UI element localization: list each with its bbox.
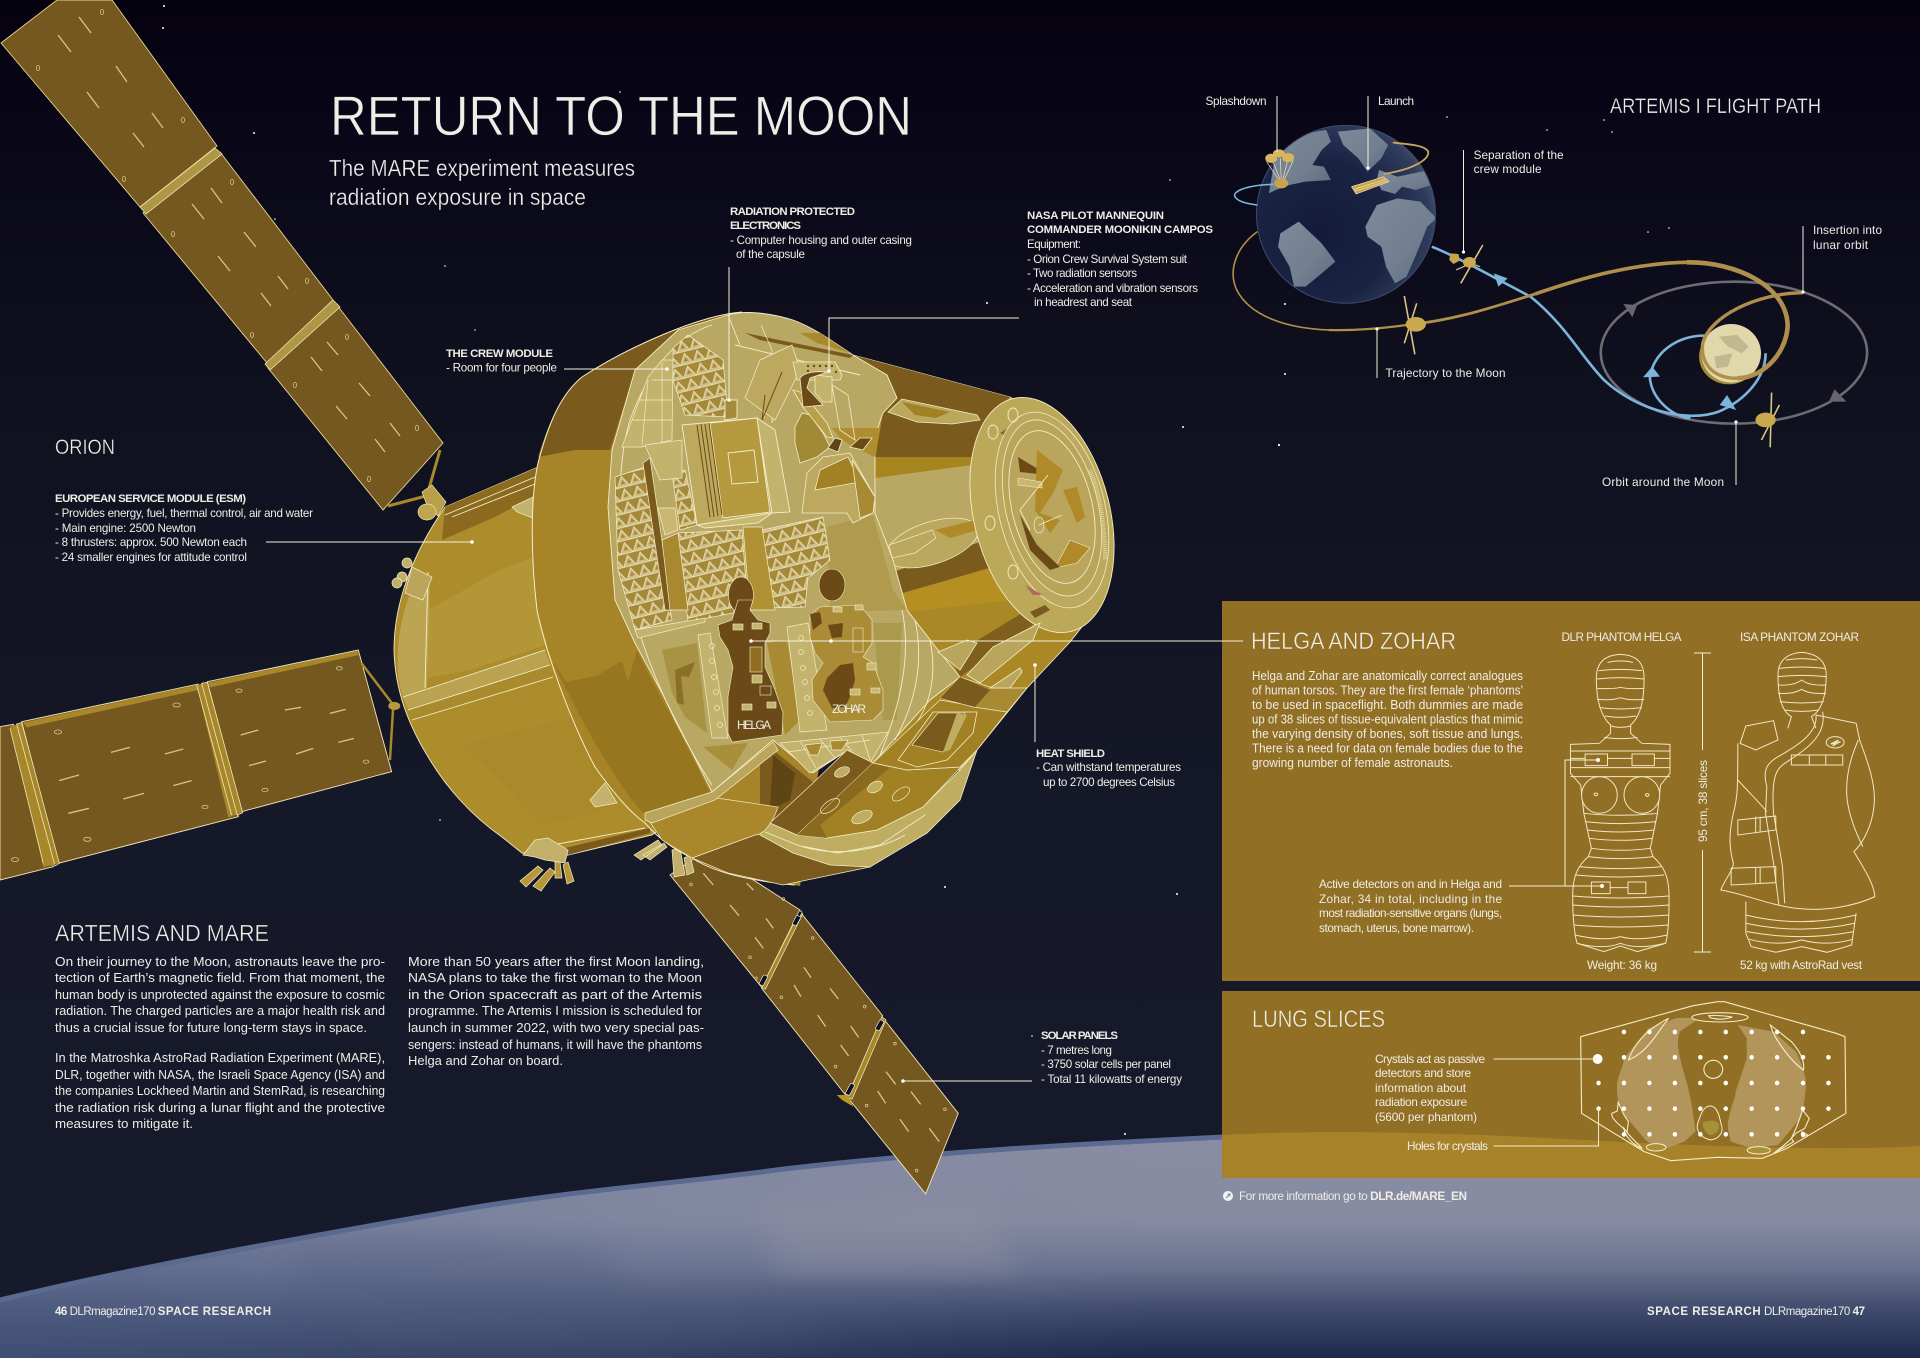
size measure: 95 cm, 38 slices: 95 cm, 38 slices	[1696, 760, 1710, 842]
adapter ring band	[532, 312, 830, 886]
nose docking ring	[947, 382, 1137, 648]
labels and leaders: Orbit around the Moon	[1602, 475, 1724, 489]
text block: Artemis column two: NASA plans to take the first woman to the Moon	[408, 970, 702, 985]
panel: lung slices	[1222, 991, 1920, 1178]
callout: radiation protected electronics: of the capsule	[736, 248, 805, 261]
flight path diagram	[1206, 94, 1882, 489]
callout: NASA pilot mannequin: - Two radiation sensors	[1027, 267, 1137, 280]
text block: Artemis column two: sengers: instead of humans, it will have the phantoms	[408, 1037, 702, 1052]
text block: Artemis column one: tection of Earth’s magnetic field. From that moment, the	[55, 970, 385, 985]
icon: separated crew module	[1449, 253, 1460, 264]
leader: Helga and Zohar	[749, 639, 1243, 643]
callout: crew module: - Room for four people	[446, 362, 557, 374]
capsule cone	[853, 355, 1103, 770]
thrusters	[392, 558, 694, 891]
diagram: thorax cross-section	[1494, 1002, 1846, 1161]
electronics box	[682, 400, 790, 528]
text block: Artemis column one: DLR, together with NASA, the Israeli Space Agency (ISA) and	[55, 1067, 385, 1082]
callout: European service module: - 8 thrusters: approx. 500 Newton each	[55, 536, 247, 549]
callout: holes for crystals: Holes for crystals	[1407, 1139, 1488, 1153]
label: ISA phantom Zohar: ISA PHANTOM ZOHAR	[1740, 630, 1859, 644]
phantom Helga model	[718, 577, 783, 742]
text block: Artemis column two: programme. The Artemis I mission is scheduled for	[408, 1003, 703, 1018]
text block: phantom description	[1252, 668, 1524, 770]
text block: Artemis column two: in the Orion spacecraft as part of the Artemis	[408, 987, 702, 1002]
pilot mannequin Moonikin Campos	[793, 362, 875, 523]
callout: active detectors: stomach, uterus, bone marrow).	[1319, 921, 1474, 935]
text block: Artemis column two: Helga and Zohar on board.	[408, 1053, 563, 1068]
heading: Orion: ORION	[55, 436, 115, 459]
text block: phantom description: to be used in spaceflight. Both dummies are made	[1252, 697, 1523, 712]
text block: phantom description: Helga and Zohar are anatomically correct analogues	[1252, 668, 1523, 683]
spacecraft: Orion cutaway	[392, 312, 1137, 891]
callout: heat shield: HEAT SHIELD	[1036, 748, 1105, 760]
icon: splashdown parachutes	[1265, 149, 1294, 188]
diagram: Zohar phantom with vest	[1721, 652, 1875, 952]
lattice panels and bays	[615, 325, 830, 638]
orbit drawing	[1233, 125, 1867, 447]
callout: NASA pilot mannequin: - Orion Crew Survival System suit	[1027, 253, 1188, 266]
callout: crystals	[1375, 1052, 1485, 1124]
heading: flight path: ARTEMIS I FLIGHT PATH	[1610, 95, 1821, 118]
link: more information: For more information go to DLR.de/MARE_EN	[1239, 1189, 1467, 1203]
text block: phantom description: up of 38 slices of tissue-equivalent plastics that mimic	[1252, 712, 1524, 727]
callout: radiation protected electronics: ELECTRONICS	[730, 220, 801, 232]
solar panel: lower wing	[670, 850, 958, 1194]
callout: active detectors: most radiation-sensitive organs (lungs,	[1319, 906, 1502, 920]
callout: heat shield	[1033, 663, 1181, 789]
label: Helga weight: Weight: 36 kg	[1587, 958, 1657, 972]
callout: crew module: THE CREW MODULE	[446, 348, 553, 360]
solar panel: left wing	[0, 650, 400, 880]
text block: phantom description: of human torsos. They are the first female ‘phantoms’	[1252, 683, 1523, 698]
icon: Orion in lunar orbit	[1756, 393, 1779, 447]
icon: Orion after separation	[1456, 245, 1483, 283]
callout: NASA pilot mannequin: COMMANDER MOONIKIN CAMPOS	[1027, 224, 1213, 236]
callout: crystals: Crystals act as passive	[1375, 1052, 1485, 1066]
subtitle	[329, 155, 635, 210]
callout: NASA pilot mannequin: Equipment:	[1027, 238, 1081, 251]
planet horizon	[0, 1120, 1920, 1358]
text block: Artemis column two: launch in summer 2022, with two very special pas-	[408, 1020, 704, 1035]
callout: active detectors: Zohar, 34 in total, including in the	[1319, 892, 1502, 906]
callout: crystals: information about	[1375, 1081, 1467, 1095]
callout: solar panels: SOLAR PANELS	[1041, 1030, 1118, 1042]
moon	[1699, 324, 1761, 384]
callout: European service module	[55, 493, 474, 564]
text block: Artemis column one: In the Matroshka AstroRad Radiation Experiment (MARE),	[55, 1050, 385, 1065]
callout: solar panels: - 3750 solar cells per panel	[1041, 1058, 1171, 1071]
labels and leaders: Splashdown	[1206, 94, 1266, 108]
panel: Helga and Zohar	[1222, 601, 1920, 981]
label: DLR phantom Helga: DLR PHANTOM HELGA	[1562, 630, 1682, 644]
service module body	[394, 440, 700, 855]
callout: crystals: (5600 per phantom)	[1375, 1110, 1477, 1124]
callout: radiation protected electronics: - Computer housing and outer casing	[730, 234, 912, 247]
text block: Artemis column one: thus a crucial issue for future long-term stays in space.	[55, 1020, 367, 1035]
gold launch ascent and blue re-entry arcs	[1235, 143, 1428, 205]
callout: active detectors: Active detectors on and in Helga and	[1319, 877, 1502, 891]
size measure: 95 cm, 38 slices	[1694, 653, 1711, 952]
text block: Artemis column one: measures to mitigate it.	[55, 1116, 193, 1131]
callout: NASA pilot mannequin: - Acceleration and vibration sensors	[1027, 282, 1198, 295]
footer: right page: SPACE RESEARCH DLRmagazine170 47	[1647, 1306, 1865, 1318]
subtitle: radiation exposure in space	[329, 184, 586, 210]
earth	[1256, 125, 1436, 303]
labels and leaders: Insertion into	[1813, 223, 1882, 237]
heading: Artemis and MARE: ARTEMIS AND MARE	[55, 920, 269, 946]
lower strap and hatches	[645, 623, 1040, 858]
icon: launch rocket	[1352, 177, 1389, 194]
callout: solar panels	[901, 1030, 1182, 1086]
stars	[162, 5, 1670, 1135]
labels and leaders: Separation of the	[1474, 148, 1564, 162]
title: RETURN TO THE MOON	[330, 84, 912, 147]
heading: Helga and Zohar: HELGA AND ZOHAR	[1251, 628, 1456, 655]
text block: Artemis column one	[55, 954, 386, 1131]
callout: solar panels: - 7 metres long	[1041, 1044, 1112, 1057]
label: ZOHAR: ZOHAR	[832, 702, 866, 716]
footer: left page: 46 DLRmagazine170 SPACE RESEARCH	[55, 1306, 272, 1318]
callout: solar panels: - Total 11 kilowatts of energy	[1041, 1073, 1182, 1086]
icon: Orion on trajectory	[1404, 296, 1426, 354]
heading: lung slices: LUNG SLICES	[1252, 1006, 1385, 1033]
label: HELGA: HELGA	[737, 718, 771, 732]
callout: European service module: - Main engine: 2500 Newton	[55, 522, 196, 535]
subtitle: The MARE experiment measures	[329, 155, 635, 181]
text block: Artemis column one: the companies Lockheed Martin and StemRad, is researching	[55, 1083, 385, 1098]
text block: Artemis column one: radiation. The charged particles are a major health risk and	[55, 1003, 385, 1018]
callout: European service module: - 24 smaller engines for attitude control	[55, 551, 247, 564]
text block: phantom description: There is a need for data on female bodies due to the	[1252, 741, 1523, 756]
callout: crew module	[446, 348, 669, 374]
callout: European service module: - Provides energy, fuel, thermal control, air and water	[55, 507, 313, 520]
text block: phantom description: the varying density of bones, soft tissue and lungs.	[1252, 726, 1523, 741]
callout: NASA pilot mannequin	[827, 210, 1213, 373]
labels and leaders	[1206, 94, 1882, 489]
text block: Artemis column one: the radiation risk during a lunar flight and the protective	[55, 1100, 385, 1115]
callout: crystals: detectors and store	[1375, 1066, 1471, 1080]
text block: Artemis column two	[408, 954, 704, 1068]
callout: European service module: EUROPEAN SERVICE MODULE (ESM)	[55, 493, 246, 505]
labels and leaders: Trajectory to the Moon	[1386, 366, 1506, 380]
labels and leaders: Launch	[1378, 94, 1414, 108]
label: Zohar weight: 52 kg with AstroRad vest	[1740, 958, 1863, 972]
phantom Zohar model	[810, 569, 883, 722]
callout: crystals: radiation exposure	[1375, 1095, 1467, 1109]
callout: radiation protected electronics	[727, 206, 912, 402]
gold trajectory	[1233, 232, 1803, 378]
callout: NASA pilot mannequin: in headrest and seat	[1034, 296, 1133, 309]
gray lunar orbit	[1601, 282, 1867, 424]
callout: active detectors	[1319, 758, 1604, 935]
seat panels	[698, 623, 888, 773]
labels and leaders: crew module	[1474, 162, 1542, 176]
cutaway face	[608, 313, 960, 792]
callout: NASA pilot mannequin: NASA PILOT MANNEQUIN	[1027, 210, 1164, 222]
blue trajectory	[1432, 247, 1766, 418]
text block: Artemis column two: More than 50 years after the first Moon landing,	[408, 954, 704, 969]
text block: Artemis column one: human body is unprotected against the exposure to cosmic	[55, 987, 386, 1002]
callout: radiation protected electronics: RADIATION PROTECTED	[730, 206, 855, 218]
callout: heat shield: - Can withstand temperatures	[1036, 761, 1181, 774]
solar panel: upper left wing	[1, 0, 446, 520]
diagram: Helga phantom outline	[1570, 654, 1670, 952]
text block: phantom description: growing number of female astronauts.	[1252, 755, 1453, 770]
labels and leaders: lunar orbit	[1813, 238, 1869, 252]
callout: heat shield: up to 2700 degrees Celsius	[1043, 776, 1175, 789]
text block: Artemis column one: On their journey to the Moon, astronauts leave the pro-	[55, 954, 385, 969]
lower dark hull and heat shield shell	[692, 750, 977, 885]
